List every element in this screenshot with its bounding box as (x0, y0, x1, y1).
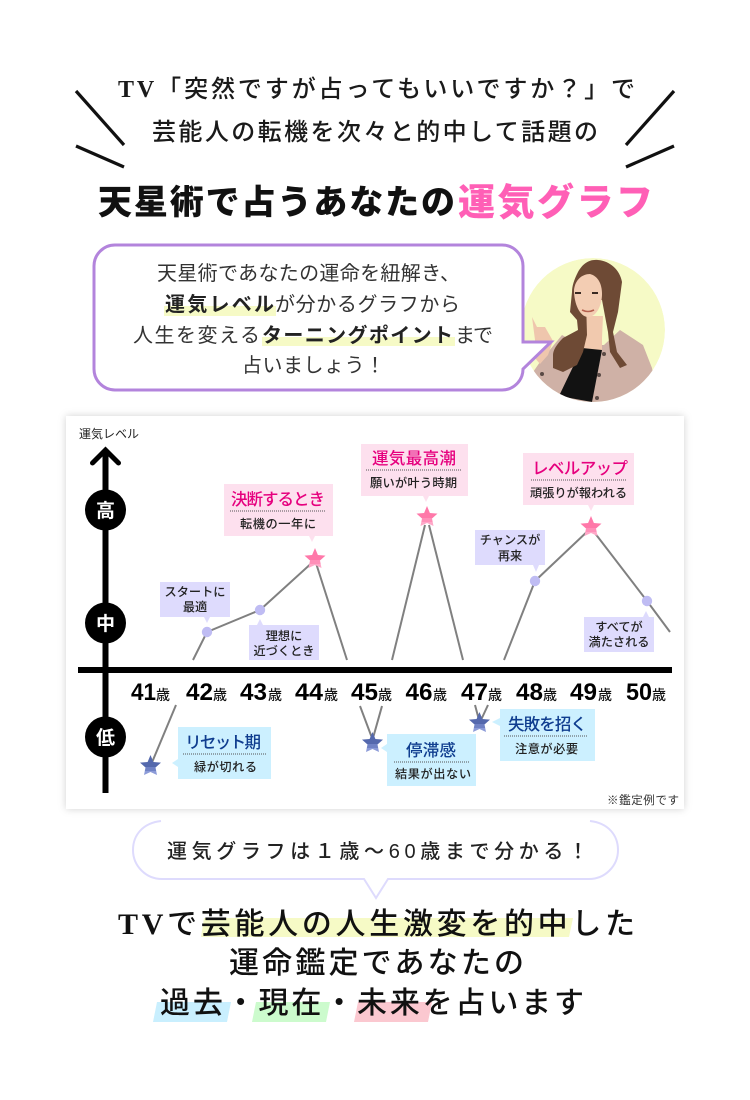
callout: リセット期 (172, 727, 271, 779)
callout: 理想に近づくとき (249, 619, 319, 660)
callout: 停滞感 (381, 734, 476, 786)
pink stars (304, 506, 602, 568)
hand (532, 317, 553, 364)
x axis age labels: 歳 (156, 687, 170, 703)
portrait of fortune teller (524, 258, 665, 402)
callout: すべてが満たされる: すべてが (595, 619, 643, 634)
callout: レベルアップ: レベルアップ (532, 459, 628, 478)
x axis age labels: 45 (351, 679, 378, 706)
callout: 理想に近づくとき: 近づくとき (254, 644, 314, 658)
callout: 失敗を招く: 注意が必要 (515, 741, 578, 756)
face (574, 274, 602, 317)
x axis age labels: 50 (626, 679, 652, 706)
main title: 天星術で占うあなたの (98, 184, 455, 222)
x axis age labels: 歳 (598, 687, 612, 703)
bubble line 1: 天星術であなたの運命を紐解き、 (157, 262, 460, 285)
intro line 1: TV「突然ですが占ってもいいですか？」で (118, 76, 635, 103)
graph dots (202, 576, 652, 637)
level marker: high: 高 (96, 500, 115, 522)
bubble line 3 end: まで (455, 325, 493, 347)
highlight: past (153, 1002, 231, 1022)
x axis age labels: 42 (186, 679, 213, 706)
chart panel (66, 416, 684, 809)
main title pink part: 運気グラフ (458, 181, 653, 223)
callout: 失敗を招く (492, 709, 595, 761)
callout: スタートに最適 (160, 582, 230, 623)
x axis age labels: 48 (516, 679, 543, 706)
highlight: ターニングポイント (262, 337, 455, 346)
callout: スタートに最適: 最適 (183, 599, 207, 614)
callout: チャンスが再来 (475, 530, 545, 572)
x axis age labels: 49 (570, 679, 597, 706)
callout: 理想に近づくとき: 理想に (266, 629, 302, 643)
callout: レベルアップ: 頑張りが報われる (530, 485, 627, 500)
bubble line 2 rest: が分かるグラフから (275, 293, 460, 316)
callout: 停滞感: 停滞感 (406, 741, 456, 760)
callout: すべてが満たされる (584, 611, 654, 652)
jacket buttons (540, 352, 606, 400)
speech bubble (94, 245, 551, 390)
callout: 運気最高潮 (361, 444, 468, 502)
jacket (534, 330, 652, 402)
x axis age labels: 歳 (652, 687, 666, 703)
x axis age labels: 41 (131, 679, 156, 706)
x axis (78, 667, 672, 673)
y axis with arrow (92, 450, 118, 793)
callout: 運気最高潮: 願いが叶う時期 (370, 475, 457, 490)
y axis label: 運気レベル (79, 426, 139, 441)
x axis age labels: 歳 (213, 687, 227, 703)
callout: リセット期: リセット期 (185, 733, 261, 752)
blue stars (140, 712, 490, 775)
level marker: low (85, 716, 126, 758)
level marker: high (85, 490, 126, 530)
closing line 3: 過去・現在・未来を占います (160, 987, 584, 1020)
callout: チャンスが再来: 再来 (498, 549, 522, 563)
callout: 決断するとき (224, 484, 333, 542)
level marker: middle (85, 602, 126, 644)
level marker: middle: 中 (96, 613, 115, 635)
bubble line 3 bold: ターニングポイント (262, 323, 453, 347)
age range pill (133, 821, 618, 898)
x axis age labels: 歳 (488, 687, 502, 703)
x axis age labels: 47 (461, 679, 488, 706)
x axis age labels: 歳 (433, 687, 447, 703)
callout: 決断するとき: 決断するとき (231, 490, 325, 509)
x axis age labels: 歳 (543, 687, 557, 703)
callout: すべてが満たされる: 満たされる (589, 634, 649, 649)
callout: リセット期: 緑が切れる (194, 759, 257, 774)
x axis age labels: 43 (240, 679, 267, 706)
neck and chest (584, 316, 603, 351)
bubble line 4: 占いましょう！ (242, 354, 385, 377)
callout: レベルアップ (523, 453, 634, 511)
callout: 失敗を招く: 失敗を招く (508, 715, 587, 734)
bubble line 3 start: 人生を変える (133, 324, 260, 347)
hair (553, 260, 627, 372)
highlight: line 1 (201, 918, 573, 937)
callout: チャンスが再来: チャンスが (480, 532, 540, 547)
fortune line graph (150, 525, 670, 766)
x axis age labels: 歳 (268, 687, 282, 703)
highlight: 運気レベル (164, 306, 276, 316)
highlight: future (354, 1002, 432, 1022)
x axis age labels: 44 (295, 679, 324, 706)
note: ※鑑定例です (607, 793, 679, 807)
x axis age labels: 46 (406, 679, 432, 706)
black top (559, 348, 602, 402)
x axis age labels: 歳 (378, 687, 392, 703)
x axis age labels: 歳 (324, 687, 338, 703)
x axis age labels (131, 679, 666, 706)
closing line 2: 運命鑑定であなたの (229, 947, 524, 980)
level marker: low: 低 (96, 727, 115, 749)
callout: 停滞感: 結果が出ない (395, 766, 471, 781)
callout: 運気最高潮: 運気最高潮 (372, 449, 456, 468)
emphasis lines left (76, 91, 124, 167)
highlight: present (252, 1002, 330, 1022)
callout: 決断するとき: 転機の一年に (240, 517, 316, 531)
closing line 1: TVで芸能人の人生激変を的中した (118, 908, 635, 941)
callout: スタートに最適: スタートに (165, 585, 225, 599)
age range pill: 運気グラフは１歳～60歳まで分かる！ (167, 840, 588, 863)
bubble line 2 bold: 運気レベル (165, 293, 274, 316)
closing message (118, 908, 635, 1022)
eyes and mouth (575, 292, 598, 294)
intro line 2: 芸能人の転機を次々と的中して話題の (152, 119, 598, 146)
emphasis lines right (626, 91, 674, 167)
header: title group (98, 76, 653, 223)
